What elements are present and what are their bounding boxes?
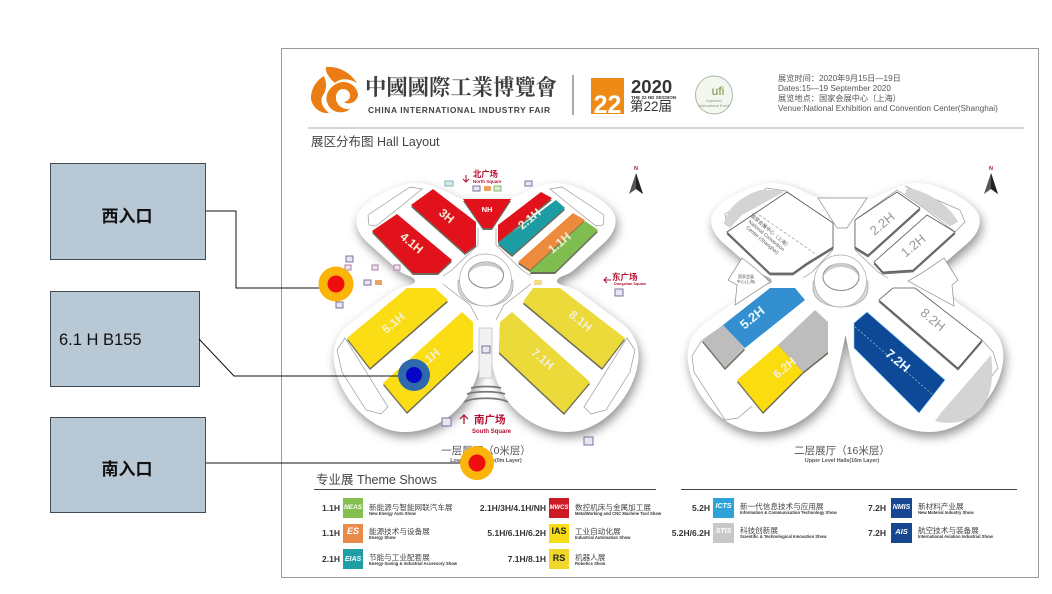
show: AIS: International Aviation Industrial Show [918, 534, 994, 539]
show: ICTS: Information & Communication Technology Show [740, 510, 837, 515]
hall: convention center: National Convention [747, 219, 785, 253]
show: NEAS: NEAS [344, 504, 363, 511]
hall: convention center: 国家会展中心（上海） [749, 212, 792, 250]
ufi logo: Approved [706, 99, 722, 103]
show: MWCS [480, 498, 662, 518]
session badge [591, 76, 677, 119]
map: upper level halls [688, 166, 1003, 464]
hall 2.2H: 2.2H [867, 209, 897, 238]
title: Chinese: 中國國際工業博覽會 [365, 71, 557, 102]
show: EIAS [322, 549, 458, 569]
event info [778, 73, 998, 113]
hall NH [463, 199, 511, 228]
show: ICTS: ICTS [716, 503, 732, 510]
label: south square [460, 413, 512, 435]
compass [984, 166, 998, 194]
caption: Upper Level Halls(16m Layer) [805, 458, 879, 464]
caption: Lower Level Halls(0m Layer) [450, 458, 522, 464]
show: RS: Robotics Show [575, 561, 606, 566]
label: east square [604, 272, 646, 286]
compass: N [634, 166, 638, 172]
label: east square: 东广场 [612, 272, 638, 282]
hall 2.1H [498, 192, 565, 255]
hall 1.1H: 1.1H [545, 229, 574, 256]
callout: west entrance: 西入口 [102, 207, 152, 226]
caption: 一层展厅（0米层） [441, 444, 531, 457]
hall 1.2H: 1.2H [898, 231, 928, 260]
show: ICTS [692, 498, 837, 518]
label: north square [463, 169, 502, 184]
show: ES [322, 524, 430, 543]
floor plate [334, 183, 638, 432]
show: AIS: 7.2H [868, 528, 886, 538]
hall 5.2H [702, 288, 805, 368]
show: NEAS: 新能源与智能网联汽车展 [369, 502, 453, 512]
show: IAS [487, 524, 631, 543]
poster frame [282, 48, 1038, 578]
hall 6.2H: 6.2H [770, 354, 799, 381]
show: NMIS [868, 498, 974, 518]
event info: 展览地点：国家会展中心（上海） [778, 93, 901, 103]
show: NMIS: 7.2H [868, 503, 886, 513]
callout: booth 6.1 H B155 [50, 292, 430, 391]
hall 4.1H [372, 214, 452, 273]
show: NEAS: 1.1H [322, 503, 340, 513]
label: north square: North Square [473, 179, 502, 184]
callout: south entrance [50, 418, 494, 512]
floor plate [688, 183, 1003, 432]
west pavilion [728, 258, 770, 305]
hall 8.2H: 8.2H [918, 305, 948, 334]
east pavilion [908, 258, 958, 306]
show: STIS: 5.2H/6.2H [672, 528, 710, 538]
show: MWCS: MWCS [550, 505, 568, 511]
event info: Venue:National Exhibition and Convention Center(Shanghai) [778, 104, 998, 113]
callout: south entrance: 南入口 [102, 460, 152, 479]
service icons [336, 181, 623, 445]
hall 4.1H: 4.1H [397, 229, 426, 256]
show: RS: RS [553, 553, 565, 563]
hall 5.1H: 5.1H [379, 309, 408, 336]
session badge: THE 22 ND SESSION [631, 95, 677, 100]
show: ES: Energy Show [369, 535, 396, 540]
session badge: 22 [594, 91, 621, 119]
show: STIS: Scientific & Technological Innovation Show [740, 534, 827, 539]
caption [794, 444, 890, 464]
central ring [458, 254, 513, 306]
caption [441, 444, 531, 464]
grey service areas [724, 188, 992, 423]
hall 7.1H [499, 312, 590, 413]
title: English: CHINA INTERNATIONAL INDUSTRY FAIR [368, 105, 550, 115]
show: ES: ES [347, 526, 359, 536]
event info: 展览时间：2020年9月15日—19日 [778, 73, 901, 83]
show: MWCS: 2.1H/3H/4.1H/NH [480, 503, 546, 513]
west pavilion: 国家会展 [738, 273, 754, 279]
hall 3H [411, 189, 476, 253]
session badge: 第22届 [630, 98, 672, 114]
show: NMIS: NMIS [893, 504, 911, 511]
show: AIS [868, 523, 994, 543]
show: IAS: Industrial Automation Show [575, 535, 631, 540]
hall 1.1H [518, 213, 598, 272]
show: ES: 1.1H [322, 528, 340, 538]
show: IAS: 工业自动化展 [575, 526, 621, 536]
caption: 二层展厅（16米层） [794, 444, 890, 457]
hall 3H: 3H [436, 206, 457, 226]
show: IAS: IAS [551, 526, 567, 536]
hall NH: NH [482, 205, 492, 214]
hall 2.1H: 2.1H [515, 205, 544, 232]
callout: booth 6.1 H B155: 6.1 H B155 [59, 331, 142, 349]
ufi logo: ufi [712, 84, 724, 98]
show: STIS: STIS [716, 528, 732, 535]
show: NEAS [322, 498, 453, 518]
show: IAS: 5.1H/6.1H/6.2H [487, 528, 546, 538]
hall 8.1H [523, 288, 625, 368]
map: lower level halls [334, 166, 646, 464]
show: RS: 7.1H/8.1H [508, 554, 546, 564]
hall 7.1H: 7.1H [528, 345, 557, 372]
show: RS: 机器人展 [575, 552, 606, 562]
show: EIAS: 节能与工业配套展 [369, 552, 430, 562]
callout: west entrance [50, 164, 354, 302]
icon: fair logo [311, 67, 358, 113]
show: NEAS: New Energy Auto Show [369, 511, 417, 516]
label: north square: 北广场 [473, 169, 498, 179]
label: south square: 南广场 [474, 413, 506, 426]
event info: Dates:15—19 September 2020 [778, 84, 891, 93]
show: STIS: 科技创新展 [740, 525, 778, 535]
label: east square: Dongzhan Square [614, 282, 646, 286]
show: RS [508, 549, 606, 569]
hall 6.1H: 6.1H [414, 345, 443, 372]
hall 8.2H [879, 288, 982, 368]
hall: convention center: Center (Shanghai) [745, 225, 780, 256]
hall: convention center [727, 192, 833, 273]
show: NMIS: New Material Industry Show [918, 510, 974, 515]
south steps [464, 328, 508, 402]
central ring [813, 255, 868, 307]
heading: theme shows: 专业展 Theme Shows [316, 472, 437, 487]
show: NMIS: 新材料产业展 [918, 501, 964, 511]
ufi logo: International Event [699, 104, 729, 108]
ufi logo [696, 76, 732, 114]
compass [629, 166, 643, 194]
show: ES: 能源技术与设备展 [369, 526, 430, 536]
west pavilion: 中心(上海) [737, 278, 756, 284]
theme shows [314, 472, 1017, 569]
label: south square: South Square [472, 429, 512, 435]
header [311, 67, 998, 119]
session badge: 2020 [631, 76, 672, 97]
compass: N [989, 166, 993, 172]
show: MWCS: 数控机床与金属加工展 [575, 502, 651, 512]
hall 7.2H: 7.2H [883, 346, 913, 375]
show: EIAS: Energy-Saving & Industrial Accessory Show [369, 561, 458, 566]
hall 6.1H [383, 312, 473, 412]
show: AIS: AIS [894, 527, 908, 536]
show: STIS [672, 523, 827, 543]
hall 2.2H [855, 192, 920, 255]
show: ICTS: 5.2H [692, 503, 710, 513]
hall 7.2H [854, 312, 945, 413]
hall 8.1H: 8.1H [566, 307, 595, 334]
hall 6.2H [737, 310, 828, 412]
north funnel [818, 198, 867, 228]
hall 1.2H [874, 215, 955, 272]
show: EIAS: EIAS [345, 556, 361, 563]
hall 5.2H: 5.2H [737, 303, 767, 332]
show: AIS: 航空技术与装备展 [918, 525, 979, 535]
hall 5.1H [347, 288, 448, 368]
show: EIAS: 2.1H [322, 554, 340, 564]
heading: hall layout: 展区分布图 Hall Layout [311, 135, 440, 149]
show: ICTS: 新一代信息技术与应用展 [740, 501, 824, 511]
show: MWCS: MetalWorking and CNC Machine Tool Show [575, 511, 662, 516]
